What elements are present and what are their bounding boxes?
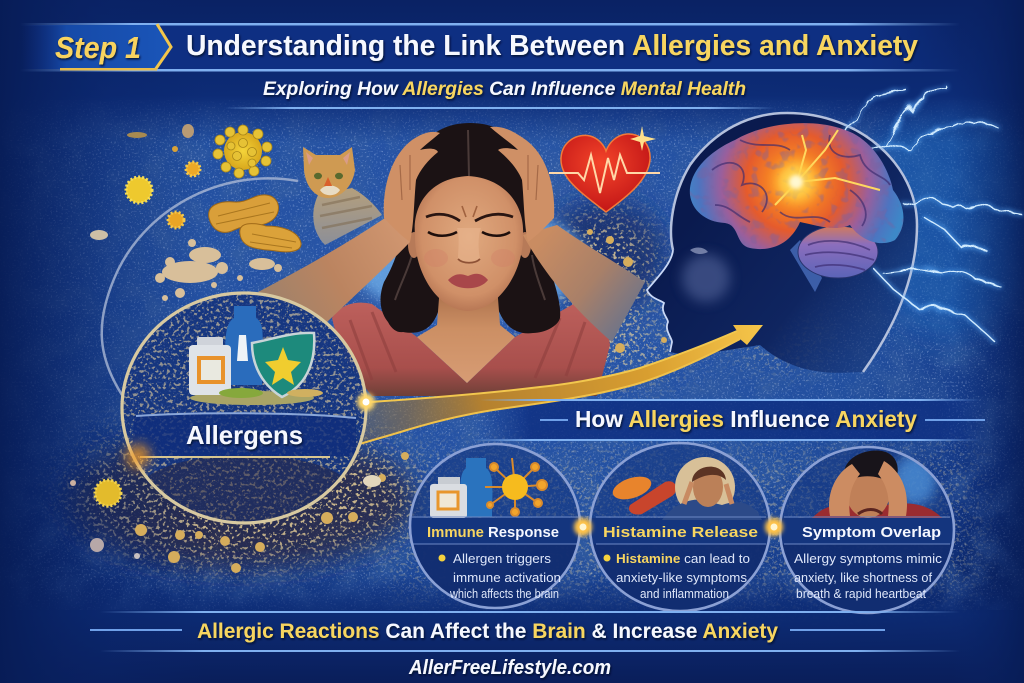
icon: dust cluster <box>155 239 282 301</box>
step badge: Step 1 <box>55 30 141 65</box>
bullet <box>438 554 446 562</box>
lightning core <box>840 83 1017 337</box>
hair <box>381 123 560 333</box>
icon: lightning bolts <box>840 83 1017 337</box>
icon: white bottle <box>430 477 467 518</box>
panel: immune response <box>405 444 585 614</box>
description: symptom overlap: anxiety, like shortness of <box>794 571 933 585</box>
icon: pollen grains <box>90 124 272 506</box>
panel: histamine release <box>585 443 775 614</box>
icon: cat <box>303 147 382 245</box>
description: symptom overlap: Allergy symptoms mimic <box>794 552 942 566</box>
icon: immune cell <box>485 458 547 516</box>
face <box>408 176 531 311</box>
heading: immune response: Immune Response <box>427 525 559 541</box>
connector sparkles <box>574 518 783 536</box>
description: immune response: Allergen triggers <box>453 552 551 566</box>
heading: histamine release: Histamine Release <box>603 524 758 541</box>
large arc around allergens <box>102 178 298 395</box>
description: histamine release: anxiety-like symptoms <box>616 571 747 585</box>
icon: allergen pieces <box>612 476 676 514</box>
icon: distressed man <box>812 450 942 518</box>
figure: head silhouette <box>647 113 917 373</box>
icon: glowing brain <box>685 120 910 292</box>
section heading: How Allergies Influence Anxiety <box>575 406 917 432</box>
allergens label: Allergens <box>186 420 303 450</box>
panel: allergens circle <box>120 293 375 525</box>
shirt <box>332 302 610 396</box>
icon: large pollen <box>213 125 272 178</box>
bottom message: Allergic Reactions Can Affect the Brain & Increase Anxiety <box>197 620 778 643</box>
neck and chest <box>417 285 515 383</box>
icon: shield <box>252 333 314 397</box>
icon: man with headache <box>662 457 762 520</box>
figure: woman holding her head <box>258 123 645 396</box>
title banner <box>20 23 960 72</box>
gold dust particles <box>70 229 782 573</box>
description: histamine release: and inflammation <box>640 587 729 601</box>
lightning glow <box>840 83 1017 337</box>
bullet <box>604 554 610 562</box>
description: immune response: which affects the brain <box>449 587 559 601</box>
arms <box>258 218 645 342</box>
panel: symptom overlap <box>775 447 965 614</box>
icon: white bottle <box>189 337 231 395</box>
icon: heart with pulse <box>549 126 660 212</box>
title text: Understanding the Link Between Allergies and Anxiety <box>186 30 918 62</box>
blue glow behind woman <box>352 206 588 318</box>
description: immune response: immune activation <box>453 571 561 585</box>
description: histamine release: Histamine can lead to <box>616 552 745 566</box>
icon: blue bottle <box>460 458 492 517</box>
allergens ring <box>122 293 366 523</box>
website: AllerFreeLifestyle.com <box>408 657 611 679</box>
icon: allergy products <box>189 306 323 405</box>
hands <box>384 127 554 242</box>
golden arrow <box>347 325 763 448</box>
allergens band <box>132 413 356 457</box>
step badge <box>22 24 171 70</box>
icon: blue bottle <box>225 306 263 385</box>
heading: symptom overlap: Symptom Overlap <box>802 524 941 541</box>
icon: peanuts <box>209 195 301 252</box>
subtitle: Exploring How Allergies Can Influence Mental Health <box>263 79 746 100</box>
description: symptom overlap: breath & rapid heartbeat <box>796 587 926 601</box>
halo ring around brain <box>671 113 917 372</box>
